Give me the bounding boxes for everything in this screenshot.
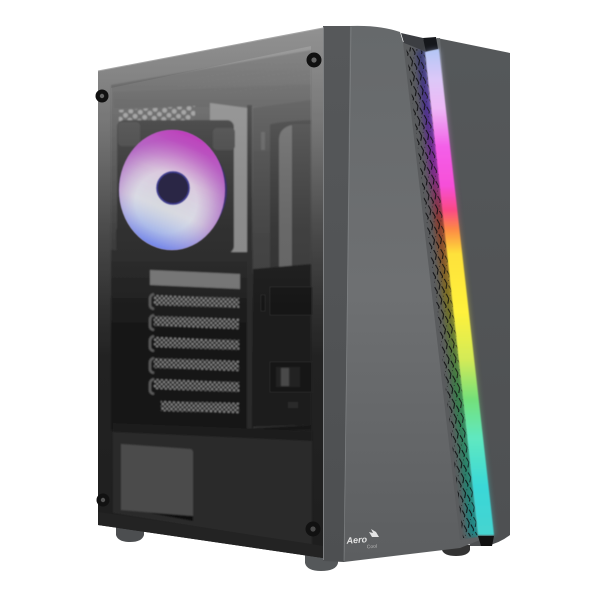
blank PCI bracket: [150, 270, 240, 289]
glass side panel: [98, 28, 323, 558]
LED vent channel: [403, 42, 482, 540]
rainbow LED strip: [425, 49, 494, 535]
PSU window: [121, 444, 193, 516]
screw: bottom left: [96, 494, 110, 506]
rear light panel: [210, 103, 247, 269]
strip base notch: [478, 536, 494, 546]
case interior: [111, 50, 312, 546]
feet: [116, 527, 470, 571]
cutouts in right chamber: [310, 288, 312, 391]
logo: AeroCool: Cool: [367, 544, 377, 550]
front bevel strip: [323, 26, 351, 562]
right side panel: [430, 38, 510, 546]
motherboard tray rail: [247, 105, 252, 430]
logo: AeroCool: Aero: [345, 534, 368, 546]
screw: top left: [96, 90, 108, 102]
fan: [119, 130, 227, 250]
top mesh: [165, 50, 311, 96]
infographic: PC tower case product image: [96, 26, 510, 571]
right chamber: [253, 100, 311, 428]
PCI slot covers: [154, 295, 239, 413]
fan hub: [157, 172, 189, 204]
top notch: [423, 37, 438, 52]
screw: bottom right: [306, 522, 320, 536]
left interior rail: [111, 250, 147, 352]
logo: AeroCool: [345, 529, 379, 550]
PSU shroud: [113, 427, 312, 546]
screw: top right: [306, 52, 322, 68]
glass haze: [98, 28, 323, 360]
rear honeycomb vent: [118, 106, 196, 122]
front face panel: [344, 26, 480, 562]
fan frame: [116, 120, 235, 253]
glass frame: [98, 28, 323, 558]
